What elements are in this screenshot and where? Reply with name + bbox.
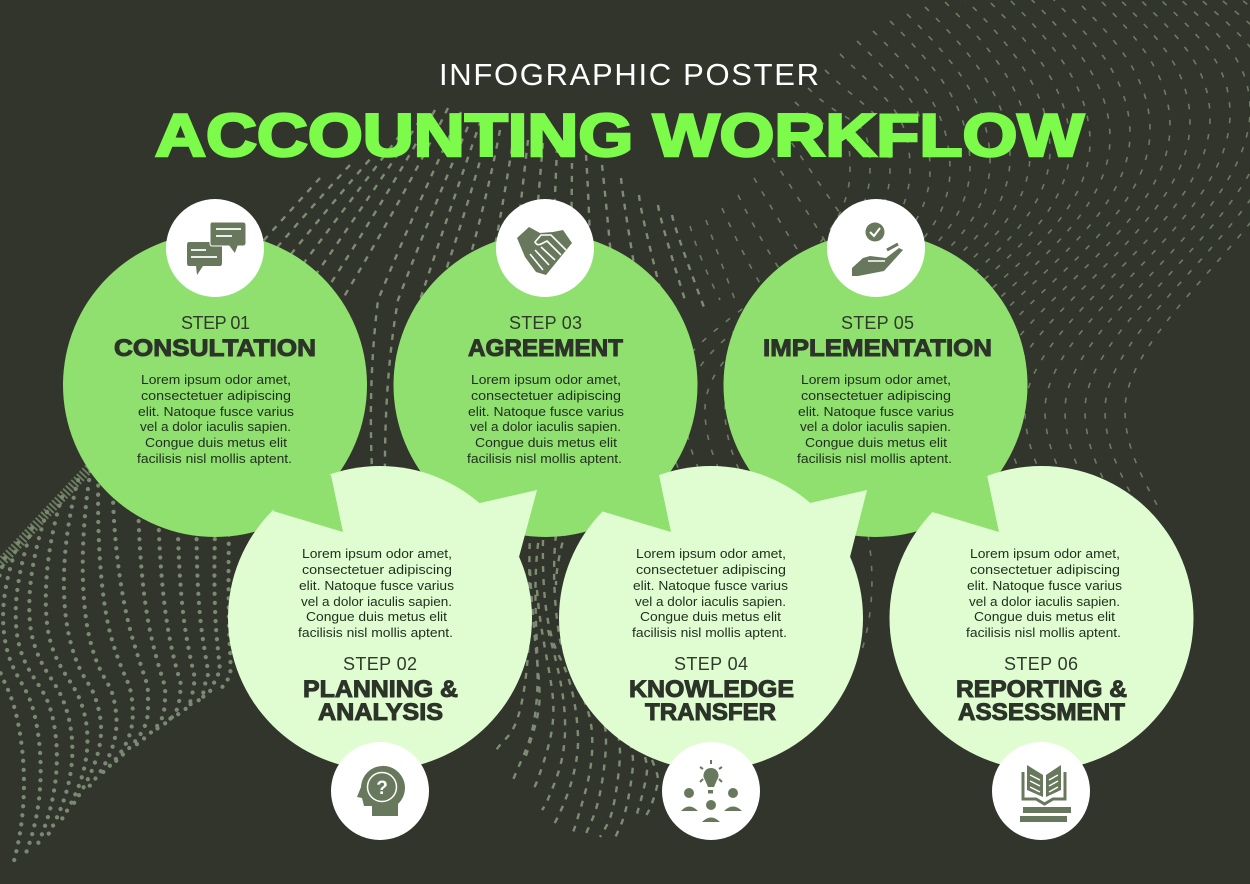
panel: step 03 agreement: STEP 03: [509, 313, 582, 333]
panel: step 06 reporting and assessment: REPORTING &: [956, 676, 1127, 703]
panel: step 02 planning and analysis: consectetuer adipiscing: [302, 562, 452, 577]
icon: lightbulb and people: [662, 742, 760, 840]
panel: step 04 knowledge transfer: TRANSFER: [645, 699, 776, 726]
panel: step 01 consultation: consectetuer adipiscing: [141, 388, 291, 403]
panel: step 04 knowledge transfer: consectetuer adipiscing: [636, 562, 786, 577]
panel: step 05 implementation: vel a dolor iaculis sapien.: [800, 419, 951, 434]
panel: step 04 knowledge transfer: Congue duis metus elit: [640, 609, 781, 624]
panel: step 06 reporting and assessment: elit. Natoque fusce varius: [967, 578, 1123, 593]
panel: step 05 implementation: [724, 233, 1028, 537]
panel: step 02 planning and analysis: Lorem ipsum odor amet,: [302, 546, 452, 561]
panel: step 05 implementation: STEP 05: [841, 313, 914, 333]
pointer: step 05 tail: [929, 470, 999, 532]
panel: step 01 consultation: Congue duis metus elit: [145, 435, 287, 450]
panel: step 06 reporting and assessment: facilisis nisl mollis aptent.: [966, 625, 1121, 640]
panel: step 01 consultation: vel a dolor iaculis sapien.: [140, 419, 291, 434]
panel: step 06 reporting and assessment: consectetuer adipiscing: [970, 562, 1120, 577]
panel: step 05 implementation: Lorem ipsum odor amet,: [801, 372, 951, 387]
panel: step 03 agreement: facilisis nisl mollis aptent.: [467, 451, 622, 466]
panel: step 01 consultation: Lorem ipsum odor amet,: [141, 372, 291, 387]
panel: step 03 agreement: Lorem ipsum odor amet,: [471, 372, 621, 387]
panel: step 06 reporting and assessment: ASSESSMENT: [958, 699, 1125, 726]
panel: step 02 planning and analysis: [228, 466, 537, 770]
panel: step 06 reporting and assessment: [890, 466, 1194, 770]
panel: step 02 planning and analysis: elit. Natoque fusce varius: [299, 578, 455, 593]
panel: step 04 knowledge transfer: KNOWLEDGE: [629, 676, 794, 703]
pointer: step 03 tail: [601, 470, 671, 532]
panel: step 04 knowledge transfer: STEP 04: [674, 654, 748, 674]
panel: step 03 agreement: consectetuer adipiscing: [471, 388, 621, 403]
panel: step 03 agreement: Congue duis metus elit: [475, 435, 617, 450]
panel: step 04 knowledge transfer: vel a dolor iaculis sapien.: [635, 594, 786, 609]
panel: step 05 implementation: consectetuer adipiscing: [801, 388, 951, 403]
panel: step 05 implementation: IMPLEMENTATION: [763, 335, 992, 362]
panel: step 01 consultation: [63, 233, 367, 537]
panel: step 02 planning and analysis: STEP 02: [343, 654, 417, 674]
panel: step 04 knowledge transfer: [559, 466, 867, 770]
icon: head with question mark: ?: [376, 778, 388, 799]
panel: step 06 reporting and assessment: Congue duis metus elit: [974, 609, 1115, 624]
pointer: step 01 tail: [273, 470, 343, 532]
panel: step 06 reporting and assessment: STEP 06: [1004, 654, 1078, 674]
title block: [155, 57, 1084, 169]
panel: step 02 planning and analysis: PLANNING &: [303, 676, 458, 703]
panel: step 02 planning and analysis: Congue duis metus elit: [306, 609, 447, 624]
icon: handshake: [496, 199, 594, 297]
icon: open book: [992, 742, 1090, 840]
panel: step 06 reporting and assessment: Lorem ipsum odor amet,: [970, 546, 1120, 561]
subtitle: INFOGRAPHIC POSTER: [439, 57, 819, 92]
panel: step 04 knowledge transfer: elit. Natoque fusce varius: [633, 578, 789, 593]
panel: step 05 implementation: facilisis nisl mollis aptent.: [797, 451, 952, 466]
panel: step 03 agreement: [394, 233, 698, 537]
panel: step 02 planning and analysis: ANALYSIS: [318, 699, 443, 726]
panel: step 01 consultation: facilisis nisl mollis aptent.: [137, 451, 292, 466]
panel: step 02 planning and analysis: vel a dolor iaculis sapien.: [301, 594, 452, 609]
icon: head with question mark: [331, 742, 429, 840]
main title: ACCOUNTING WORKFLOW: [155, 102, 1084, 169]
panel: step 03 agreement: AGREEMENT: [468, 335, 623, 362]
panel: step 01 consultation: STEP 01: [181, 313, 250, 333]
panel: step 02 planning and analysis: facilisis nisl mollis aptent.: [298, 625, 453, 640]
panel: step 04 knowledge transfer: Lorem ipsum odor amet,: [636, 546, 786, 561]
icon: hand with check: [827, 199, 925, 297]
panel: step 03 agreement: vel a dolor iaculis sapien.: [470, 419, 621, 434]
panel: step 05 implementation: elit. Natoque fusce varius: [798, 404, 955, 419]
panel: step 03 agreement: elit. Natoque fusce varius: [468, 404, 625, 419]
panel: step 05 implementation: Congue duis metus elit: [805, 435, 947, 450]
panel: step 04 knowledge transfer: facilisis nisl mollis aptent.: [632, 625, 787, 640]
icon: chat bubbles: [166, 199, 264, 297]
panel: step 01 consultation: CONSULTATION: [114, 335, 316, 362]
panel: step 06 reporting and assessment: vel a dolor iaculis sapien.: [969, 594, 1120, 609]
panel: step 01 consultation: elit. Natoque fusce varius: [138, 404, 295, 419]
